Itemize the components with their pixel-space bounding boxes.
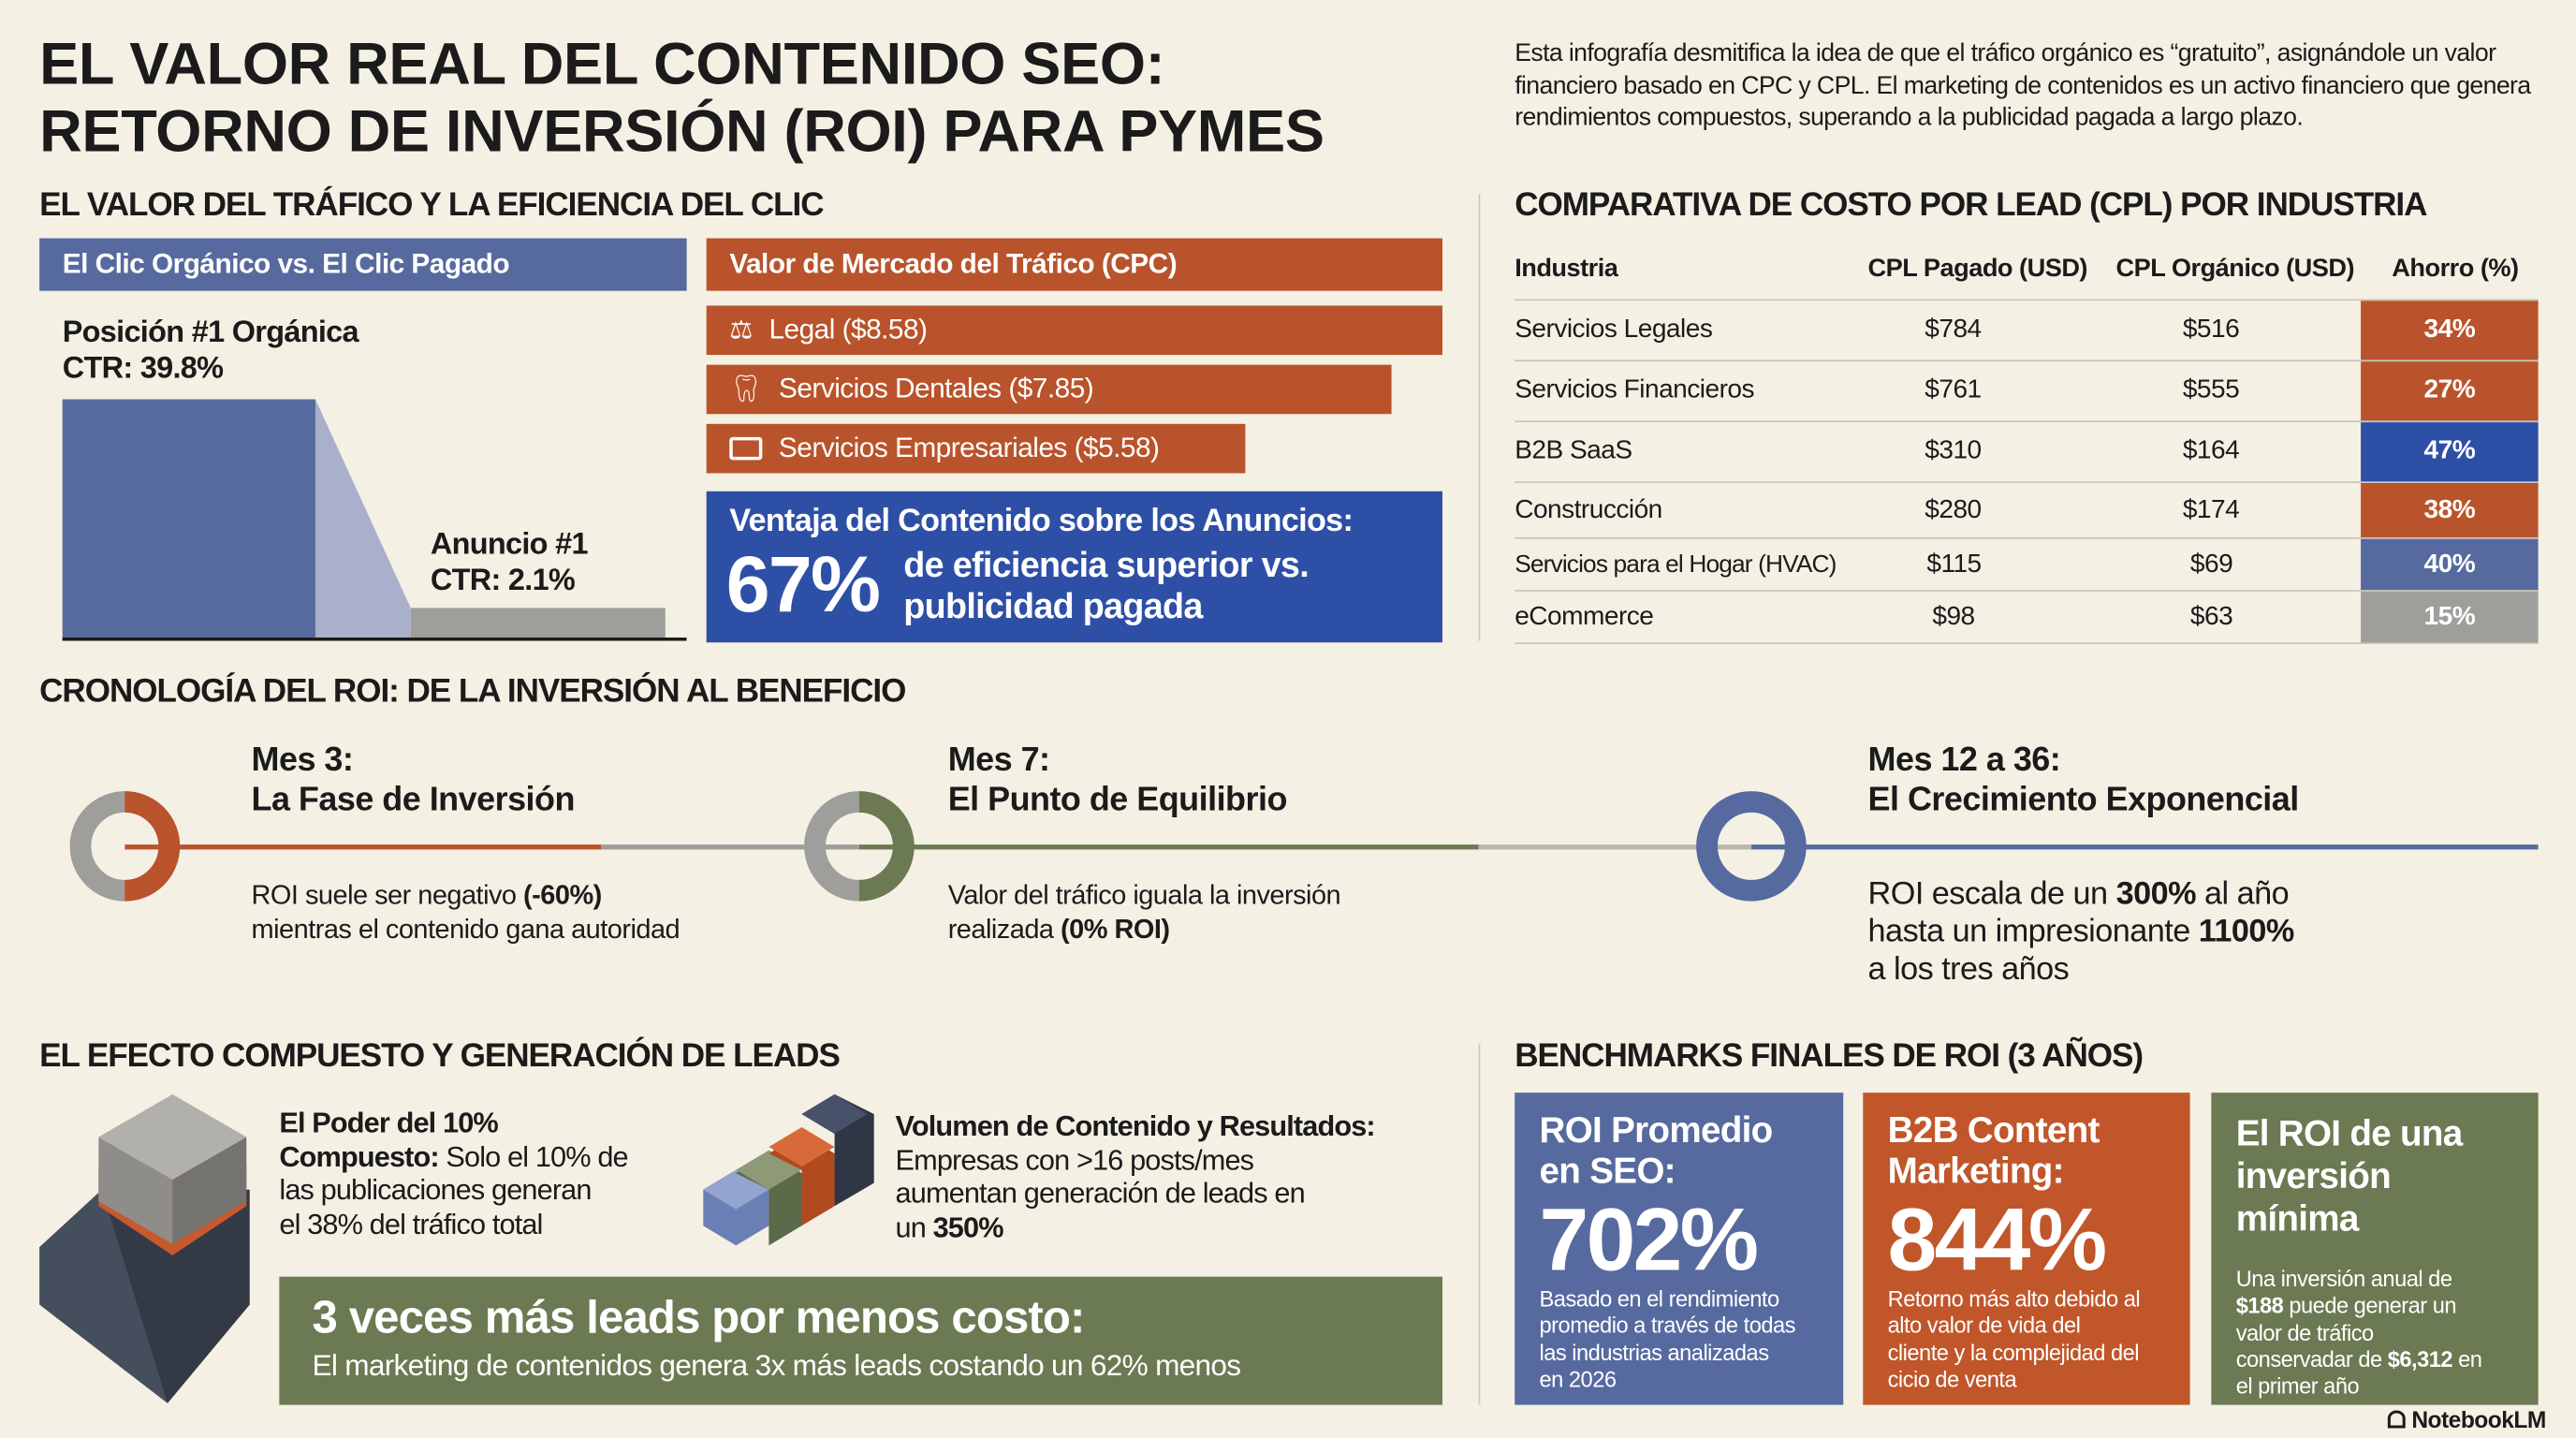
- icon: donut mes 7: [804, 791, 915, 902]
- table: CPL: Servicios para el Hogar (HVAC): [1515, 550, 1837, 579]
- card: ROI promedio: en 2026: [1540, 1367, 1616, 1391]
- label organic: [63, 314, 359, 385]
- table: CPL: $310: [1925, 437, 1982, 465]
- text: volumen de contenido: aumentan generación de leads en: [896, 1177, 1305, 1210]
- intro text: Esta infografía desmitifica la idea de que el tráfico orgánico es “gratuito”, asignándole un valor financiero basado en CPC y CPL. El marketing de contenidos es un activo financiero que genera rendimientos compuestos, superando a la publicidad pagada a largo plazo.: [1515, 39, 2531, 131]
- table: CPL: 15%: [2424, 602, 2475, 630]
- text: poder del 10%: El Poder del 10%: [279, 1106, 498, 1138]
- card: B2B: B2B Content: [1888, 1109, 2100, 1151]
- card: ROI promedio: promedio a través de todas: [1540, 1313, 1795, 1338]
- icon: stacked blocks: [703, 1093, 874, 1245]
- milestone mes 3: Mes 3:: [252, 741, 353, 779]
- milestone mes 12-36: Mes 12 a 36:: [1868, 741, 2060, 779]
- bar dental: 🦷︎: [729, 376, 762, 404]
- milestone mes 12-36: a los tres años: [1868, 951, 2069, 988]
- table: CPL: $63: [2190, 602, 2232, 630]
- title: RETORNO DE INVERSIÓN (ROI) PARA PYMES: [39, 97, 1325, 165]
- card: inversión mínima: valor de tráfico: [2236, 1320, 2374, 1345]
- card: B2B: cicio de venta: [1888, 1367, 2016, 1391]
- table: CPL: $174: [2183, 495, 2239, 523]
- text: volumen de contenido: un 350%: [896, 1211, 1003, 1243]
- table: CPL: CPL Orgánico (USD): [2116, 255, 2354, 283]
- milestone mes 7: realizada (0% ROI): [948, 916, 1169, 945]
- card: inversión mínima: [2211, 1093, 2539, 1405]
- card: B2B: alto valor de vida del: [1888, 1313, 2080, 1338]
- callout 67%: 67%: [726, 542, 879, 629]
- table: CPL: $555: [2183, 376, 2239, 404]
- text: volumen de contenido: [895, 1109, 1375, 1243]
- bar legal: ⚖: [729, 317, 753, 345]
- table: CPL: Servicios Financieros: [1515, 376, 1754, 404]
- card: inversión mínima: $188 puede generar un: [2236, 1294, 2456, 1318]
- milestone mes 12-36: hasta un impresionante 1100%: [1868, 914, 2294, 949]
- card: ROI promedio: Basado en el rendimiento: [1540, 1286, 1779, 1312]
- header orange: [707, 238, 1442, 291]
- callout 67%: publicidad pagada: [903, 587, 1203, 626]
- icon: donut mes 12: [1696, 791, 1807, 902]
- table: CPL: $761: [1925, 376, 1982, 404]
- callout: 3 veces más leads: El marketing de contenidos genera 3x más leads costando un 62% menos: [312, 1349, 1240, 1382]
- bar legal: Legal ($8.58): [768, 314, 927, 345]
- table: CPL: 27%: [2424, 376, 2475, 404]
- header orange: Valor de Mercado del Tráfico (CPC): [729, 248, 1177, 279]
- card: ROI promedio: las industrias analizadas: [1540, 1340, 1769, 1365]
- heading: cronología: CRONOLOGÍA DEL ROI: DE LA INVERSIÓN AL BENEFICIO: [39, 674, 905, 710]
- card: inversión mínima: inversión: [2236, 1155, 2391, 1196]
- milestone mes 3: ROI suele ser negativo (-60%): [252, 881, 602, 910]
- table: CPL: CPL Pagado (USD): [1868, 255, 2087, 283]
- callout: 3 veces más leads: [279, 1277, 1442, 1405]
- callout 67%: [707, 492, 1442, 642]
- table: CPL: $784: [1925, 315, 1982, 344]
- table: CPL: $98: [1932, 602, 1975, 630]
- table: CPL: Construcción: [1515, 495, 1662, 523]
- card: inversión mínima: conservadar de $6,312 en: [2236, 1347, 2481, 1372]
- table: CPL: $69: [2190, 550, 2232, 578]
- table: CPL: $280: [1925, 495, 1982, 523]
- header bar blue: El Clic Orgánico vs. El Clic Pagado: [63, 248, 509, 279]
- milestone mes 3: mientras el contenido gana autoridad: [252, 916, 680, 945]
- table: CPL: [1515, 255, 2539, 644]
- card: inversión mínima: el primer año: [2236, 1374, 2359, 1399]
- table: CPL: Servicios Legales: [1515, 315, 1712, 344]
- table: CPL: $164: [2183, 437, 2239, 465]
- label organic: CTR: 39.8%: [63, 350, 223, 385]
- heading: CPL: COMPARATIVA DE COSTO POR LEAD (CPL) POR INDUSTRIA: [1515, 187, 2426, 224]
- bar legal: [707, 305, 1442, 355]
- card: inversión mínima: Una inversión anual de: [2236, 1267, 2452, 1292]
- milestone mes 7: El Punto de Equilibrio: [948, 781, 1287, 818]
- card: B2B: [1863, 1093, 2190, 1405]
- milestone mes 12-36: El Crecimiento Exponencial: [1868, 781, 2299, 818]
- header bar blue: [39, 238, 687, 291]
- text: poder del 10%: las publicaciones generan: [279, 1173, 592, 1206]
- milestone mes 3: [252, 741, 680, 945]
- bar business: [707, 424, 1245, 473]
- milestone mes 12-36: ROI escala de un 300% al año: [1868, 875, 2289, 912]
- table: CPL: $516: [2183, 315, 2239, 344]
- label organic: Posición #1 Orgánica: [63, 314, 359, 348]
- heading: efecto compuesto: EL EFECTO COMPUESTO Y GENERACIÓN DE LEADS: [39, 1038, 840, 1075]
- heading: valor del tráfico: EL VALOR DEL TRÁFICO Y LA EFICIENCIA DEL CLIC: [39, 187, 824, 224]
- card: inversión mínima: mínima: [2236, 1197, 2359, 1239]
- heading: benchmarks: BENCHMARKS FINALES DE ROI (3 AÑOS): [1515, 1038, 2143, 1075]
- title: [39, 30, 1325, 165]
- text: poder del 10%: el 38% del tráfico total: [279, 1207, 543, 1240]
- text: poder del 10%: Compuesto: Solo el 10% de: [279, 1139, 628, 1172]
- table: CPL: 47%: [2424, 437, 2475, 465]
- panel: CPC market value: [706, 238, 1442, 642]
- callout 67%: de eficiencia superior vs.: [903, 546, 1309, 585]
- timeline line: [124, 844, 2539, 850]
- card: B2B: 844%: [1888, 1191, 2105, 1290]
- text: poder del 10%: [279, 1106, 628, 1240]
- card: B2B: Retorno más alto debido al: [1888, 1286, 2140, 1312]
- text: volumen de contenido: Volumen de Contenido y Resultados:: [896, 1109, 1375, 1142]
- table: CPL: Ahorro (%): [2392, 255, 2519, 283]
- logo: NotebookLM: ᗝ NotebookLM: [2387, 1406, 2546, 1432]
- table: CPL: 40%: [2424, 550, 2475, 578]
- card: inversión mínima: El ROI de una: [2236, 1112, 2463, 1153]
- bar business: Servicios Empresariales ($5.58): [779, 433, 1159, 463]
- bar chart: [62, 399, 687, 640]
- table: CPL: eCommerce: [1515, 602, 1653, 630]
- text: volumen de contenido: Empresas con >16 posts/mes: [896, 1143, 1253, 1176]
- callout: 3 veces más leads: 3 veces más leads por menos costo:: [312, 1292, 1085, 1343]
- table: CPL: 38%: [2424, 495, 2475, 523]
- panel: organic vs paid chart: [39, 238, 687, 640]
- milestone mes 7: [947, 741, 1340, 945]
- label paid: Anuncio #1: [431, 526, 588, 560]
- card: ROI promedio: en SEO:: [1540, 1151, 1676, 1191]
- bar dental: Servicios Dentales ($7.85): [779, 373, 1093, 404]
- label paid: CTR: 2.1%: [431, 562, 575, 596]
- icon: isometric tower: [39, 1094, 250, 1403]
- table: CPL: Industria: [1515, 255, 1617, 283]
- title: EL VALOR REAL DEL CONTENIDO SEO:: [39, 30, 1164, 97]
- milestone mes 12-36: [1868, 741, 2299, 988]
- milestone mes 3: La Fase de Inversión: [252, 781, 575, 818]
- icon: donut mes 3: [69, 791, 180, 902]
- bar dental: [707, 365, 1392, 414]
- label paid: [431, 526, 588, 596]
- table: CPL: $115: [1926, 550, 1982, 578]
- table: CPL: 34%: [2424, 315, 2475, 344]
- card: ROI promedio: 702%: [1540, 1191, 1756, 1290]
- card: ROI promedio: [1515, 1093, 1843, 1405]
- table: CPL: B2B SaaS: [1515, 437, 1632, 465]
- card: ROI promedio: ROI Promedio: [1540, 1109, 1773, 1151]
- milestone mes 7: Valor del tráfico iguala la inversión: [948, 881, 1340, 910]
- callout 67%: Ventaja del Contenido sobre los Anuncios:: [729, 503, 1353, 539]
- card: B2B: Marketing:: [1888, 1151, 2064, 1191]
- card: B2B: cliente y la complejidad del: [1888, 1340, 2139, 1365]
- milestone mes 7: Mes 7:: [948, 741, 1050, 779]
